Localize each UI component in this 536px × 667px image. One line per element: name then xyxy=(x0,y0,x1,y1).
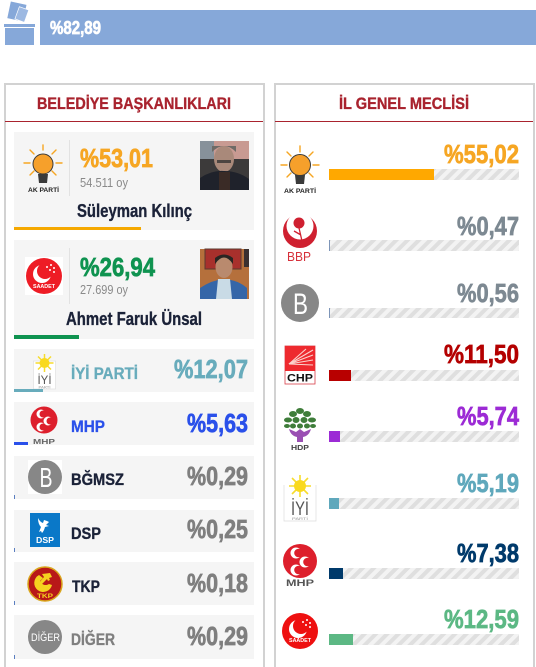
icon: BBP logo: BBP xyxy=(287,249,311,264)
row: HDP xyxy=(284,401,519,452)
icon: BBP logo xyxy=(283,212,317,264)
icon: B badge xyxy=(28,460,62,494)
icon: MHP logo xyxy=(30,406,58,446)
percentage: %26,94 xyxy=(80,252,155,282)
row: Saadet xyxy=(282,604,519,649)
icon: Saadet logo xyxy=(282,613,318,649)
candidate photo xyxy=(200,141,249,190)
icon: Diğer badge xyxy=(28,620,62,654)
icon: İYİ logo: İYİ xyxy=(38,373,52,387)
row: Bağımsız xyxy=(281,278,519,322)
icon: B badge: B xyxy=(293,288,308,321)
progress bar xyxy=(14,655,15,659)
icon: TKP logo: TKP xyxy=(37,594,53,600)
row: TKP xyxy=(14,562,254,605)
percentage: %5,19 xyxy=(457,468,519,498)
icon: CHP logo xyxy=(285,346,315,384)
row: DSP xyxy=(14,510,254,552)
card: AK Parti xyxy=(14,132,254,230)
row: İYİ Parti xyxy=(14,349,254,392)
icon: B badge: B xyxy=(40,462,52,493)
card: Saadet xyxy=(14,240,254,339)
percentage: %53,01 xyxy=(80,143,153,173)
icon: TKP logo xyxy=(28,567,62,601)
row: AK Parti xyxy=(281,139,519,195)
percentage: %5,63 xyxy=(187,408,248,438)
bar xyxy=(329,308,519,318)
icon: İYİ logo: PARTİ xyxy=(292,516,308,521)
icon: MHP logo: MHP xyxy=(33,437,55,446)
row: MHP xyxy=(283,538,519,588)
icon: HDP logo: HDP xyxy=(291,443,309,452)
icon: AK Parti logo xyxy=(24,145,62,194)
icon: İYİ logo xyxy=(284,475,316,521)
progress bar xyxy=(14,548,15,552)
percentage: %0,29 xyxy=(187,461,248,491)
progress bar xyxy=(14,335,79,339)
icon: MHP logo: MHP xyxy=(286,578,314,588)
icon: MHP logo xyxy=(283,544,317,588)
row: CHP xyxy=(285,339,519,384)
heading: il genel meclisi: İL GENEL MECLİSİ xyxy=(339,94,469,113)
icon: ballot box xyxy=(4,2,35,45)
percentage: %0,18 xyxy=(187,568,248,598)
panel: il genel meclisi xyxy=(275,84,534,667)
row: Diğer xyxy=(14,615,254,659)
row: İYİ Parti xyxy=(284,468,519,521)
candidate name: Ahmet Faruk Ünsal xyxy=(66,309,202,329)
icon: Saadet logo: SAADET xyxy=(33,284,56,290)
turnout bar xyxy=(40,10,536,45)
icon: B badge xyxy=(281,284,319,322)
icon: DSP logo: DSP xyxy=(36,536,55,545)
progress bar xyxy=(14,601,15,605)
candidate name: Süleyman Kılınç xyxy=(77,201,192,221)
icon: Diğer badge: DİĞER xyxy=(31,631,60,644)
percentage: %0,56 xyxy=(457,278,519,308)
row: BBP xyxy=(283,211,519,264)
bar xyxy=(329,431,519,442)
icon: AK Parti logo: AK PARTİ xyxy=(28,186,59,194)
percentage: %55,02 xyxy=(444,139,519,169)
heading: belediye başkanlıkları: BELEDİYE BAŞKANLIKLARI xyxy=(37,94,231,113)
percentage: %11,50 xyxy=(444,339,519,369)
bar xyxy=(329,240,519,251)
row: MHP xyxy=(14,402,254,446)
bar xyxy=(329,498,519,509)
votes: 27.699 oy xyxy=(80,282,128,297)
icon: AK Parti logo: AK PARTİ xyxy=(284,187,316,195)
progress bar xyxy=(14,227,141,230)
icon: Saadet logo xyxy=(25,257,63,295)
icon: İYİ logo: PARTİ xyxy=(38,384,51,390)
percentage: %0,29 xyxy=(187,621,248,651)
percentage: %12,59 xyxy=(444,604,519,634)
party name: TKP xyxy=(72,577,100,596)
candidate photo xyxy=(200,249,249,299)
progress bar xyxy=(14,495,15,499)
icon: AK Parti logo xyxy=(281,146,319,195)
percentage: %5,74 xyxy=(457,401,519,431)
percentage: %7,38 xyxy=(457,538,519,568)
icon: CHP logo: CHP xyxy=(287,372,313,384)
party name: DSP xyxy=(71,524,101,543)
progress bar xyxy=(14,442,28,445)
bar xyxy=(329,169,519,180)
party name: BĞMSZ xyxy=(71,470,124,489)
percentage: %0,25 xyxy=(187,514,248,544)
party name: DİĞER xyxy=(71,630,115,649)
percentage: %0,47 xyxy=(457,211,519,241)
bar xyxy=(329,634,519,645)
bar xyxy=(329,370,519,381)
party name: İYİ PARTİ xyxy=(71,364,138,383)
percentage: %12,07 xyxy=(174,354,248,384)
panel: belediye başkanlıkları xyxy=(5,84,264,667)
progress bar xyxy=(14,389,43,392)
bar xyxy=(329,568,519,579)
icon: İYİ logo xyxy=(34,354,56,390)
icon: HDP logo xyxy=(284,408,316,452)
party name: MHP xyxy=(71,417,105,436)
row: Bağımsız xyxy=(14,456,254,499)
icon: DSP logo xyxy=(30,513,60,547)
icon: Saadet logo: SAADET xyxy=(289,638,312,644)
votes: 54.511 oy xyxy=(80,175,128,190)
turnout value: %82,89 xyxy=(50,18,101,38)
icon: İYİ logo: İYİ xyxy=(291,499,309,520)
